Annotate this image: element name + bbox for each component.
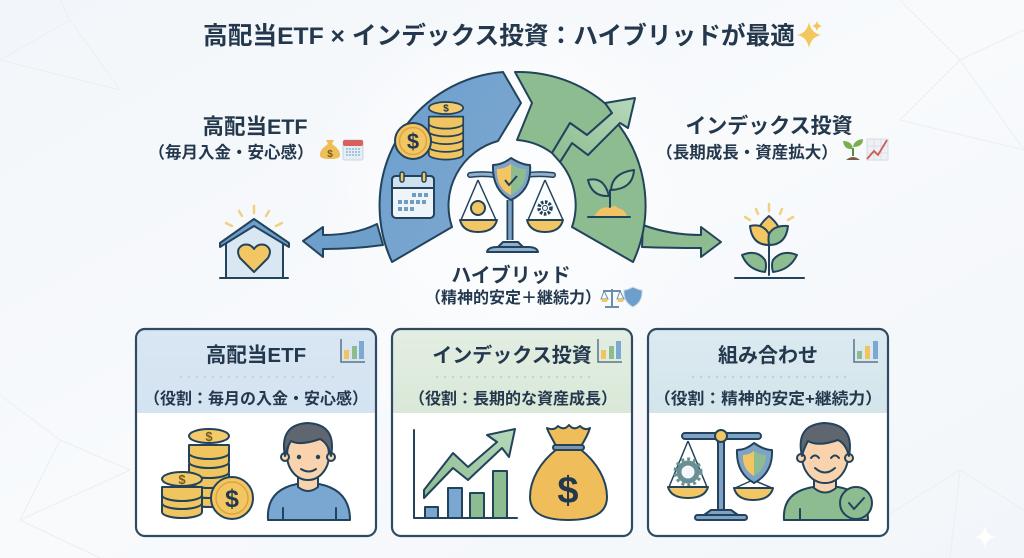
icon: mini bar chart: [598, 339, 622, 362]
role text: （役割：毎月の入金・安心感）: [144, 389, 368, 408]
icon: growth chart small: [867, 139, 888, 160]
title: 高配当ETF × インデックス投資：ハイブリッドが最適: [203, 21, 795, 50]
icon: calendar small: [343, 140, 363, 160]
icon: small shield: [624, 287, 642, 307]
label: index investing: [656, 114, 888, 162]
chart: growth bars and arrow: [414, 429, 517, 518]
icon: dollar coin: [395, 123, 431, 159]
panel: index investing: [392, 329, 632, 536]
icon: smiling person with check: [784, 423, 872, 520]
label: hybrid: [425, 263, 642, 307]
arrow: growth: [552, 98, 635, 162]
icon: coin stack: [429, 102, 463, 160]
label: hybrid: ハイブリッド: [451, 263, 571, 287]
icon: sprout: [588, 170, 634, 217]
panel: combination: [648, 329, 888, 536]
label: index investing: インデックス投資: [685, 114, 853, 138]
icon: money bag: [530, 425, 607, 520]
label: high dividend ETF: [148, 115, 363, 162]
icon: flower: [735, 204, 804, 278]
panel: high dividend ETF: [136, 329, 376, 536]
icon: house with heart: [220, 206, 289, 278]
icon: dollar coin: $: [407, 129, 419, 154]
label: high dividend ETF: （毎月入金・安心感）: [148, 142, 314, 162]
icon: coin stacks: $: [205, 429, 213, 444]
heading: 組み合わせ: [718, 344, 818, 367]
icon: coin stacks: $: [225, 485, 239, 513]
semicircle: green segment: [515, 72, 646, 262]
icon: mini bar chart: [854, 339, 878, 362]
icon: money bag small: [320, 140, 340, 160]
heading: インデックス投資: [432, 343, 592, 367]
semicircle: blue segment: [380, 72, 521, 262]
role text: （役割：精神的安定+継続力）: [654, 389, 882, 408]
arrow: left blue: [303, 224, 383, 257]
icon: coin stack: $: [443, 103, 449, 114]
icon: calendar: [392, 172, 434, 218]
label: index investing: （長期成長・資産拡大）: [656, 142, 838, 162]
icon: small scale: [601, 289, 624, 307]
icon: coin stacks: [162, 429, 253, 519]
icon: mini bar chart: [341, 339, 365, 362]
icon: balance scale: [668, 430, 773, 520]
icon: money bag small: $: [327, 149, 333, 160]
icon: money bag: $: [557, 470, 579, 512]
icon: balance scale with shield: [460, 158, 563, 252]
icon: person: [268, 423, 350, 520]
heading: 高配当ETF: [206, 344, 306, 367]
arrow: right green: [642, 225, 721, 257]
icon: sparkles: [797, 21, 822, 48]
label: high dividend ETF: 高配当ETF: [202, 115, 308, 139]
arrow: trend: [424, 429, 515, 498]
center circle: [460, 140, 563, 252]
icon: coin stacks: $: [178, 472, 186, 487]
label: hybrid: （精神的安定＋継続力）: [425, 288, 601, 307]
icon: seedling small: [843, 139, 863, 160]
role text: （役割：長期的な資産成長）: [409, 389, 617, 408]
